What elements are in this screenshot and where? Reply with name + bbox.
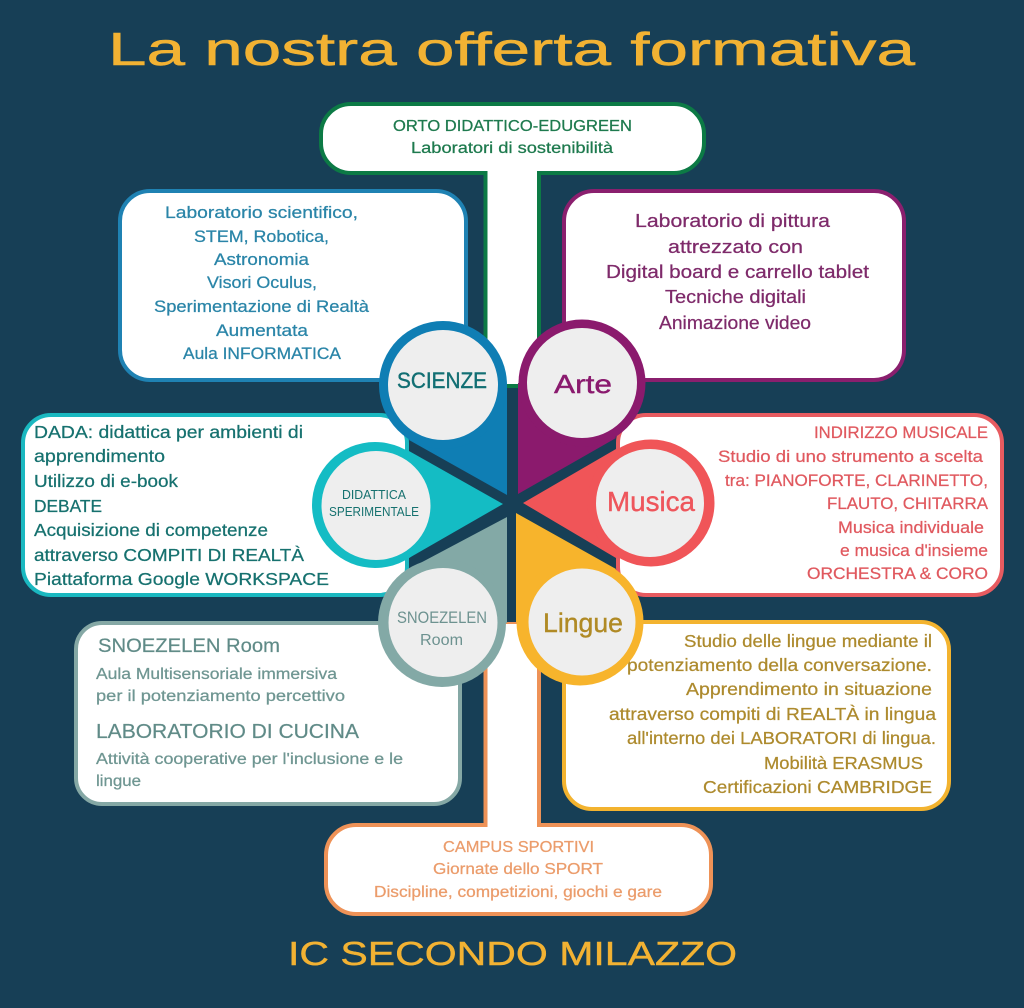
hub petal and circle: arte xyxy=(518,320,646,494)
hub petal and circle: musica: Musica xyxy=(607,486,695,517)
panel: snoezelen e cucina: Attività cooperative per l'inclusione e le xyxy=(96,751,403,768)
panel: musica: FLAUTO, CHITARRA xyxy=(827,494,989,513)
panel: musica: tra: PIANOFORTE, CLARINETTO, xyxy=(725,471,988,490)
title: La nostra offerta formativa xyxy=(108,23,916,75)
panel: arte: Digital board e carrello tablet xyxy=(606,261,869,282)
panel: scienze: Laboratorio scientifico, xyxy=(165,204,358,222)
panel: musica xyxy=(618,415,1002,595)
hub petal and circle: snoezelen: Room xyxy=(420,632,463,649)
panel: didattica sperimentale: DADA: didattica per ambienti di xyxy=(34,422,303,442)
panel: lingue: potenziamento della conversazione. xyxy=(627,655,932,675)
panel: snoezelen e cucina: SNOEZELEN Room xyxy=(98,635,280,657)
panel: orto didattico: ORTO DIDATTICO-EDUGREEN xyxy=(393,118,632,135)
panel: didattica sperimentale: Piattaforma Google WORKSPACE xyxy=(34,569,329,589)
panel: musica: ORCHESTRA & CORO xyxy=(807,564,988,583)
panel: arte xyxy=(564,191,904,380)
hub petal and circle: didattica sperimentale: DIDATTICA xyxy=(342,488,407,502)
dark gap behind the hub xyxy=(507,388,518,622)
panel: didattica sperimentale: Acquisizione di competenze xyxy=(34,520,268,540)
panel: didattica sperimentale: DEBATE xyxy=(34,496,102,516)
panel: scienze: Sperimentazione di Realtà xyxy=(154,298,370,316)
panel: campus sportivi: Giornate dello SPORT xyxy=(433,861,604,878)
panel: didattica sperimentale: Utilizzo di e-book xyxy=(34,471,178,491)
panel: musica: INDIRIZZO MUSICALE xyxy=(814,423,988,442)
hub petal and circle: lingue xyxy=(516,513,644,686)
panel: snoezelen e cucina xyxy=(76,623,460,804)
hub petal and circle: snoezelen xyxy=(378,517,507,687)
hub petal and circle: snoezelen: SNOEZELEN xyxy=(397,609,487,627)
hub petal and circle: didattica sperimentale: SPERIMENTALE xyxy=(329,505,419,519)
panel: lingue xyxy=(564,622,949,809)
panel: lingue: Studio delle lingue mediante il xyxy=(684,631,932,651)
panel: scienze: Visori Oculus, xyxy=(207,274,317,292)
panel: orto didattico xyxy=(321,104,704,386)
panel: musica: Studio di uno strumento a scelta xyxy=(718,447,984,466)
panel: musica: Musica individuale xyxy=(838,518,984,537)
panel: scienze: Astronomia xyxy=(214,251,310,269)
hub petal and circle: arte: Arte xyxy=(554,369,612,399)
panel: campus sportivi: Discipline, competizioni, giochi e gare xyxy=(374,884,662,901)
hub petal and circle: musica xyxy=(523,440,714,566)
panel: lingue: Apprendimento in situazione xyxy=(686,679,932,699)
panel: snoezelen e cucina: lingue xyxy=(96,773,141,790)
panel: campus sportivi: CAMPUS SPORTIVI xyxy=(443,839,594,856)
panel: scienze xyxy=(120,191,466,380)
panel: snoezelen e cucina: per il potenziamento percettivo xyxy=(96,688,345,705)
panel: didattica sperimentale: attraverso COMPITI DI REALTÀ xyxy=(34,545,304,565)
panel: arte: Tecniche digitali xyxy=(665,286,806,307)
hub petal and circle: scienze: SCIENZE xyxy=(397,368,487,393)
panel: lingue: Certificazioni CAMBRIDGE xyxy=(703,777,932,797)
panel: campus sportivi xyxy=(326,622,711,914)
panel: snoezelen e cucina: LABORATORIO DI CUCINA xyxy=(96,721,360,743)
panel: scienze: Aumentata xyxy=(216,322,309,340)
panel: arte: Laboratorio di pittura xyxy=(635,210,831,231)
footer school name: IC SECONDO MILAZZO xyxy=(288,935,737,972)
panel: lingue: attraverso compiti di REALTÀ in lingua xyxy=(609,704,936,724)
panel: musica: e musica d'insieme xyxy=(840,541,988,560)
panel: snoezelen e cucina: Aula Multisensoriale immersiva xyxy=(96,666,337,683)
hub petal and circle: lingue: Lingue xyxy=(543,608,623,638)
panel: scienze: STEM, Robotica, xyxy=(194,228,329,246)
hub petal and circle: didattica sperimentale xyxy=(312,442,503,568)
panel: orto didattico: Laboratori di sostenibilità xyxy=(411,140,613,157)
panel: didattica sperimentale xyxy=(23,415,407,595)
panel: scienze: Aula INFORMATICA xyxy=(183,345,341,363)
panel: lingue: Mobilità ERASMUS xyxy=(764,753,923,773)
panel: arte: Animazione video xyxy=(659,312,811,333)
panel: arte: attrezzato con xyxy=(668,236,803,257)
hub petal and circle: scienze xyxy=(379,321,507,495)
panel: lingue: all'interno dei LABORATORI di lingua. xyxy=(627,728,936,748)
panel: didattica sperimentale: apprendimento xyxy=(34,446,165,466)
